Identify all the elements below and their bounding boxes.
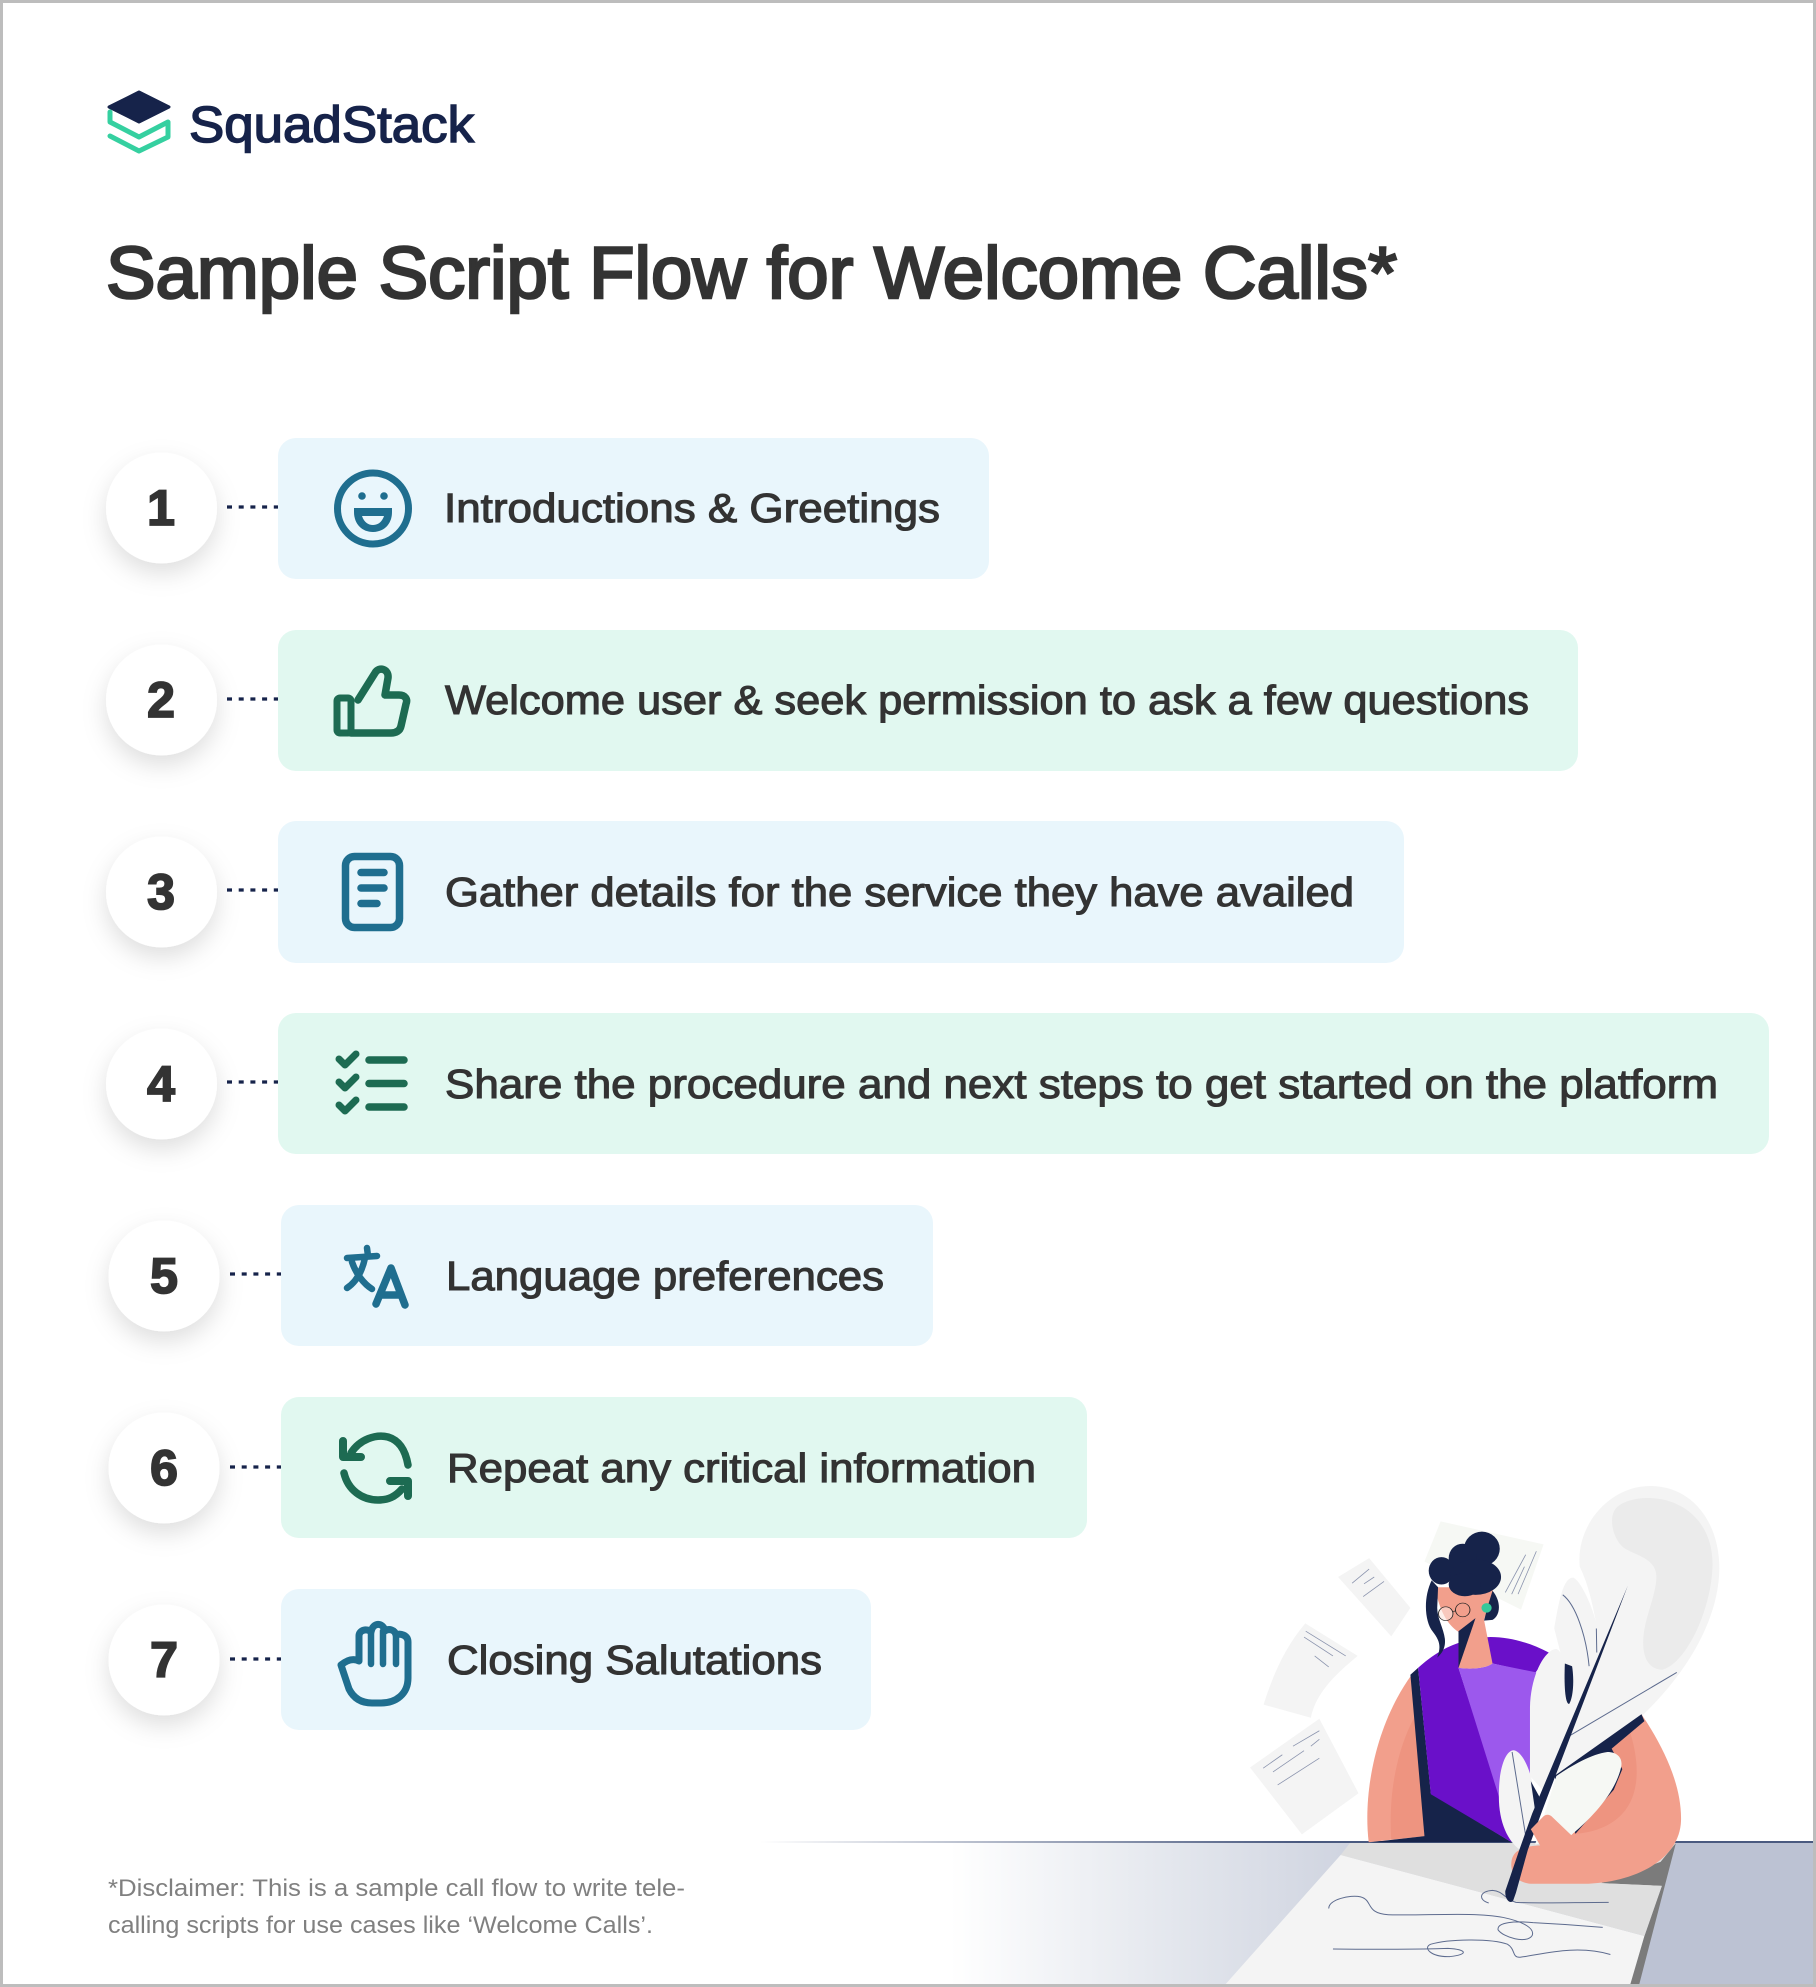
disclaimer: *Disclaimer: This is a sample call flow to write tele- (108, 1875, 685, 1902)
desk paper (1226, 1843, 1676, 1984)
hand thumb (1531, 1815, 1593, 1852)
label 1: Introductions & Greetings (444, 485, 940, 531)
woman hair (1426, 1532, 1501, 1658)
number badge 2 (106, 644, 217, 756)
panel: step 4 card (278, 1013, 1769, 1154)
number badge 7: 7 (150, 1632, 178, 1688)
step 7 (108, 1589, 871, 1730)
step 6 (108, 1397, 1087, 1538)
number badge 1 (106, 452, 217, 564)
icon: translate (347, 1248, 405, 1305)
panel: step 3 card (278, 821, 1404, 963)
icon: document (346, 856, 400, 928)
icon: checklist (339, 1054, 404, 1111)
label 4: Share the procedure and next steps to get started on the platform (445, 1061, 1718, 1107)
icon: stacked layers logo mark (109, 92, 169, 151)
label 3: Gather details for the service they have availed (445, 869, 1354, 915)
illustration: woman writing with a quill (1226, 1486, 1719, 1984)
quill feather plume (1546, 1486, 1719, 1776)
label 5: Language preferences (446, 1253, 884, 1299)
panel: step 6 card (281, 1397, 1087, 1538)
panel: step 1 card (278, 438, 989, 579)
disclaimer (108, 1875, 685, 1939)
step 1 (106, 438, 989, 579)
connector 2 (227, 697, 278, 701)
connector 6 (230, 1465, 281, 1469)
label 6: Repeat any critical information (447, 1445, 1036, 1491)
connector 1 (227, 505, 278, 509)
number badge 6 (108, 1412, 220, 1524)
connector 3 (227, 888, 278, 892)
connector 5 (230, 1272, 281, 1276)
logo (109, 92, 475, 153)
number badge 7 (108, 1604, 220, 1716)
step 3 (106, 821, 1404, 963)
logo wordmark: SquadStack (189, 96, 475, 153)
number badge 6: 6 (150, 1440, 178, 1496)
panel: step 5 card (281, 1205, 933, 1346)
step 2 (106, 630, 1578, 771)
number badge 2: 2 (147, 672, 175, 728)
woman body (1367, 1587, 1550, 1842)
connector 4 (227, 1080, 278, 1084)
step 5 (108, 1205, 933, 1346)
quill shaft (1505, 1586, 1628, 1902)
connector 7 (230, 1657, 281, 1661)
icon: smiley (338, 473, 408, 544)
table surface (760, 1841, 1816, 1987)
glasses and earring (1438, 1603, 1492, 1621)
step 4 (106, 1013, 1769, 1154)
floating papers (1250, 1521, 1544, 1834)
number badge 5: 5 (150, 1248, 178, 1304)
label 7: Closing Salutations (447, 1637, 822, 1683)
panel: step 2 card (278, 630, 1578, 771)
label 2: Welcome user & seek permission to ask a few questions (445, 677, 1529, 723)
icon: refresh arrows (343, 1436, 408, 1500)
disclaimer: calling scripts for use cases like ‘Welcome Calls’. (108, 1912, 653, 1939)
quill lower vanes (1499, 1649, 1677, 1850)
number badge 4 (106, 1028, 217, 1140)
icon: raised hand (341, 1624, 408, 1703)
title: Sample Script Flow for Welcome Calls* (106, 233, 1397, 314)
number badge 3: 3 (147, 864, 175, 920)
number badge 4: 4 (147, 1056, 175, 1112)
number badge 3 (106, 836, 217, 948)
number badge 1: 1 (147, 480, 175, 536)
panel: step 7 card (281, 1589, 871, 1730)
icon: thumbs up (337, 669, 407, 733)
raised arm and hand (1511, 1714, 1681, 1884)
number badge 5 (108, 1220, 220, 1332)
